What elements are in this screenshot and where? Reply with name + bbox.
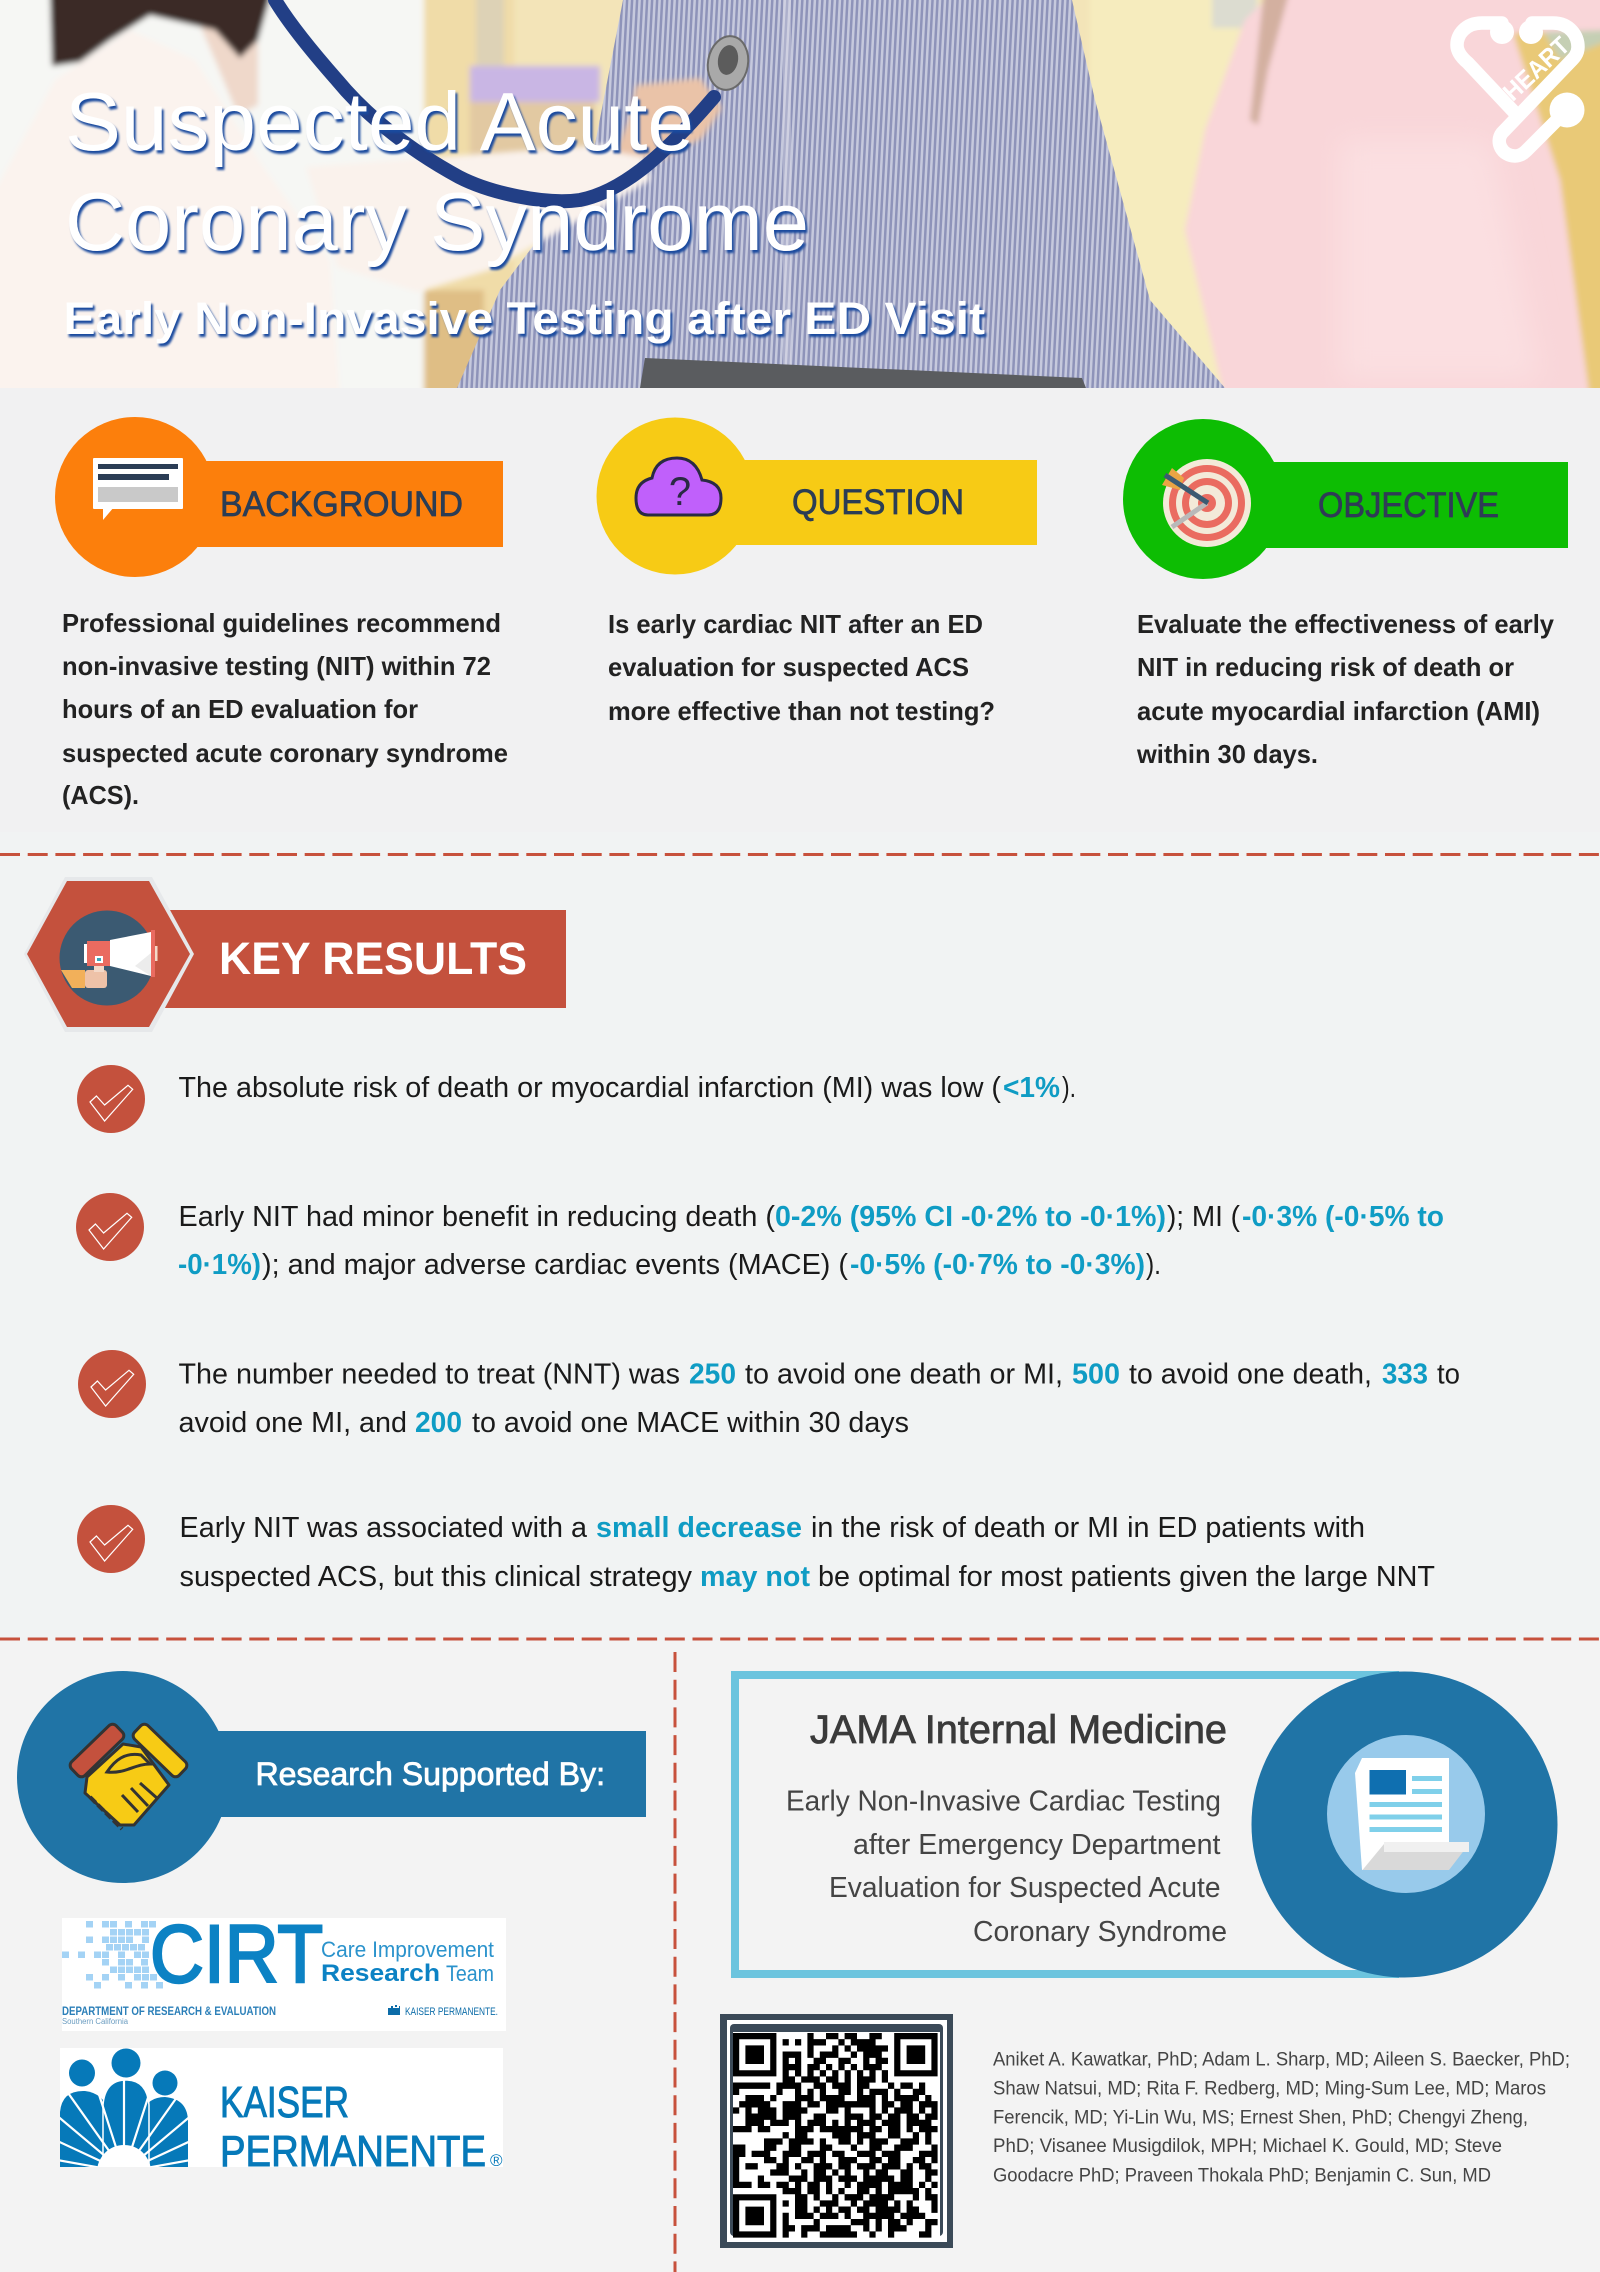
result text line: The absolute risk of death or myocardial infarction (MI) was low (	[178, 1072, 1001, 1104]
result text lines: 500	[1072, 1358, 1120, 1390]
question text: evaluation for suspected ACS	[608, 652, 969, 682]
result text lines: -0·1%)	[178, 1249, 261, 1281]
background text: (ACS).	[62, 780, 139, 810]
result 2	[76, 1193, 1444, 1281]
icon: cloud with question mark: ?	[669, 470, 691, 514]
result text lines	[180, 1512, 1435, 1593]
doctor sleeve and hand over shirt	[422, 75, 724, 293]
logo: HEART stethoscope heart: HEART	[1498, 32, 1575, 107]
logo: CIRT care improvement research team: Team	[446, 1961, 494, 1986]
result text line: ).	[1062, 1072, 1076, 1104]
result text lines: Early NIT was associated with a	[180, 1512, 588, 1544]
logo: CIRT care improvement research team: Research	[321, 1960, 440, 1987]
icon: handshake	[68, 1722, 189, 1829]
question banner: QUESTION	[792, 483, 964, 522]
authors	[993, 2048, 1570, 2186]
result text lines: -0·3% (-0·5% to	[1242, 1201, 1444, 1233]
objective banner: OBJECTIVE	[1318, 486, 1499, 525]
question text: more effective than not testing?	[608, 696, 995, 726]
logo: Kaiser Permanente	[60, 2048, 503, 2167]
result text lines	[178, 1201, 1444, 1281]
objective text: acute myocardial infarction (AMI)	[1137, 696, 1540, 726]
result text lines: The number needed to treat (NNT) was	[178, 1358, 680, 1390]
panel: JAMA publication	[735, 1672, 1558, 1978]
logo: CIRT care improvement research team: KAISER PERMANENTE.	[405, 2006, 498, 2018]
result text lines: to avoid one MACE within 30 days	[472, 1407, 909, 1439]
background text: Professional guidelines recommend	[62, 608, 501, 638]
background text	[62, 608, 508, 810]
icon: check badge	[78, 1350, 146, 1418]
panel: objective	[1123, 419, 1568, 769]
authors: Goodacre PhD; Praveen Thokala PhD; Benjamin C. Sun, MD	[993, 2164, 1491, 2186]
key results banner	[24, 877, 566, 1032]
icon: megaphone	[60, 910, 158, 1006]
result text lines: in the risk of death or MI in ED patients with	[811, 1512, 1365, 1544]
logo: CIRT care improvement research team: DEPARTMENT OF RESEARCH & EVALUATION	[62, 2006, 276, 2018]
result text lines: ); MI (	[1167, 1201, 1240, 1233]
objective text: NIT in reducing risk of death or	[1137, 652, 1514, 682]
publication circle and document icon	[1252, 1672, 1558, 1978]
panel: question	[596, 418, 1037, 726]
icon: people with sunburst	[60, 2048, 188, 2167]
hero photo: doctor examining patient	[0, 0, 1600, 400]
publication frame	[735, 1675, 1395, 1974]
logo: Kaiser Permanente: KAISER	[220, 2078, 349, 2127]
logo: CIRT care improvement research team: Care Improvement	[321, 1937, 494, 1962]
result text lines: 250	[689, 1358, 736, 1390]
result text lines: -0·5% (-0·7% to -0·3%)	[850, 1249, 1145, 1281]
result text lines: may not	[700, 1561, 810, 1593]
logo: CIRT care improvement research team: Southern California	[62, 2017, 129, 2026]
result 1	[77, 1065, 1076, 1133]
icon: speech bubble	[93, 458, 183, 520]
question banner	[596, 418, 1037, 574]
result text lines: small decrease	[596, 1512, 802, 1544]
subtitle: Early Non-Invasive Testing after ED Visit	[64, 293, 985, 344]
panel: research supported by	[17, 1671, 646, 1883]
authors: Aniket A. Kawatkar, PhD; Adam L. Sharp, MD; Aileen S. Baecker, PhD;	[993, 2048, 1570, 2070]
objective text: within 30 days.	[1136, 739, 1318, 769]
logo: CIRT care improvement research team	[62, 1909, 506, 2031]
icon: target with arrow	[1162, 459, 1251, 547]
authors: Shaw Natsui, MD; Rita F. Redberg, MD; Ming-Sum Lee, MD; Maros	[993, 2078, 1546, 2100]
article title: Evaluation for Suspected Acute	[829, 1872, 1220, 1904]
logo: Kaiser Permanente: ®	[490, 2151, 503, 2170]
authors: PhD; Visanee Musigdilok, MPH; Michael K. Gould, MD; Steve	[993, 2135, 1502, 2157]
QR code	[720, 2014, 953, 2248]
result text lines: Early NIT had minor benefit in reducing death (	[178, 1201, 775, 1233]
research banner: Research Supported By:	[256, 1756, 605, 1792]
result text lines: 333	[1382, 1358, 1428, 1390]
question text: Is early cardiac NIT after an ED	[608, 609, 983, 639]
result text lines: avoid one MI, and	[178, 1407, 407, 1439]
result text lines: to	[1437, 1358, 1460, 1390]
article title	[786, 1786, 1227, 1948]
background text: suspected acute coronary syndrome	[62, 738, 508, 768]
logo: CIRT care improvement research team: CIRT	[150, 1909, 323, 2000]
result 3	[78, 1350, 1460, 1439]
background banner: BACKGROUND	[220, 485, 463, 524]
result text lines: ); and major adverse cardiac events (MACE) (	[262, 1249, 848, 1281]
icon: check badge	[76, 1193, 144, 1261]
article title: Coronary Syndrome	[973, 1916, 1227, 1948]
icon: check badge	[77, 1065, 145, 1133]
journal name: JAMA Internal Medicine	[810, 1708, 1227, 1752]
key results banner: KEY RESULTS	[219, 933, 527, 984]
article title: Early Non-Invasive Cardiac Testing	[786, 1786, 1221, 1818]
result text lines: ).	[1146, 1249, 1161, 1281]
icon: check badge	[77, 1505, 145, 1573]
background text: hours of an ED evaluation for	[62, 694, 418, 724]
panel: background	[55, 417, 508, 810]
title: Coronary Syndrome	[65, 175, 809, 268]
result text lines: 200	[415, 1407, 462, 1439]
authors: Ferencik, MD; Yi-Lin Wu, MS; Ernest Shen, PhD; Chengyi Zheng,	[993, 2106, 1528, 2128]
logo: HEART stethoscope heart	[1457, 20, 1584, 156]
result text line: <1%	[1003, 1072, 1060, 1104]
result 4	[77, 1505, 1435, 1593]
logo: Kaiser Permanente: PERMANENTE	[220, 2127, 486, 2176]
background banner	[55, 417, 503, 577]
objective text	[1136, 609, 1555, 769]
icon: cloud with question mark	[636, 458, 721, 515]
title: Suspected Acute	[65, 75, 694, 168]
result text lines: suspected ACS, but this clinical strategy	[180, 1561, 692, 1593]
result text lines: to avoid one death or MI,	[745, 1358, 1063, 1390]
background text: non-invasive testing (NIT) within 72	[62, 651, 491, 681]
pixel pattern	[62, 1921, 163, 1988]
question text	[608, 609, 995, 726]
objective text: Evaluate the effectiveness of early	[1137, 609, 1555, 639]
article title: after Emergency Department	[853, 1829, 1220, 1861]
result text lines: 0-2% (95% CI -0·2% to -0·1%)	[775, 1201, 1166, 1233]
result text lines: to avoid one death,	[1129, 1358, 1372, 1390]
research banner	[17, 1671, 646, 1883]
title	[65, 75, 809, 268]
objective banner	[1123, 419, 1568, 579]
result text lines	[178, 1358, 1460, 1439]
result text lines: be optimal for most patients given the large NNT	[818, 1561, 1435, 1593]
panel: key results	[24, 877, 1460, 1593]
